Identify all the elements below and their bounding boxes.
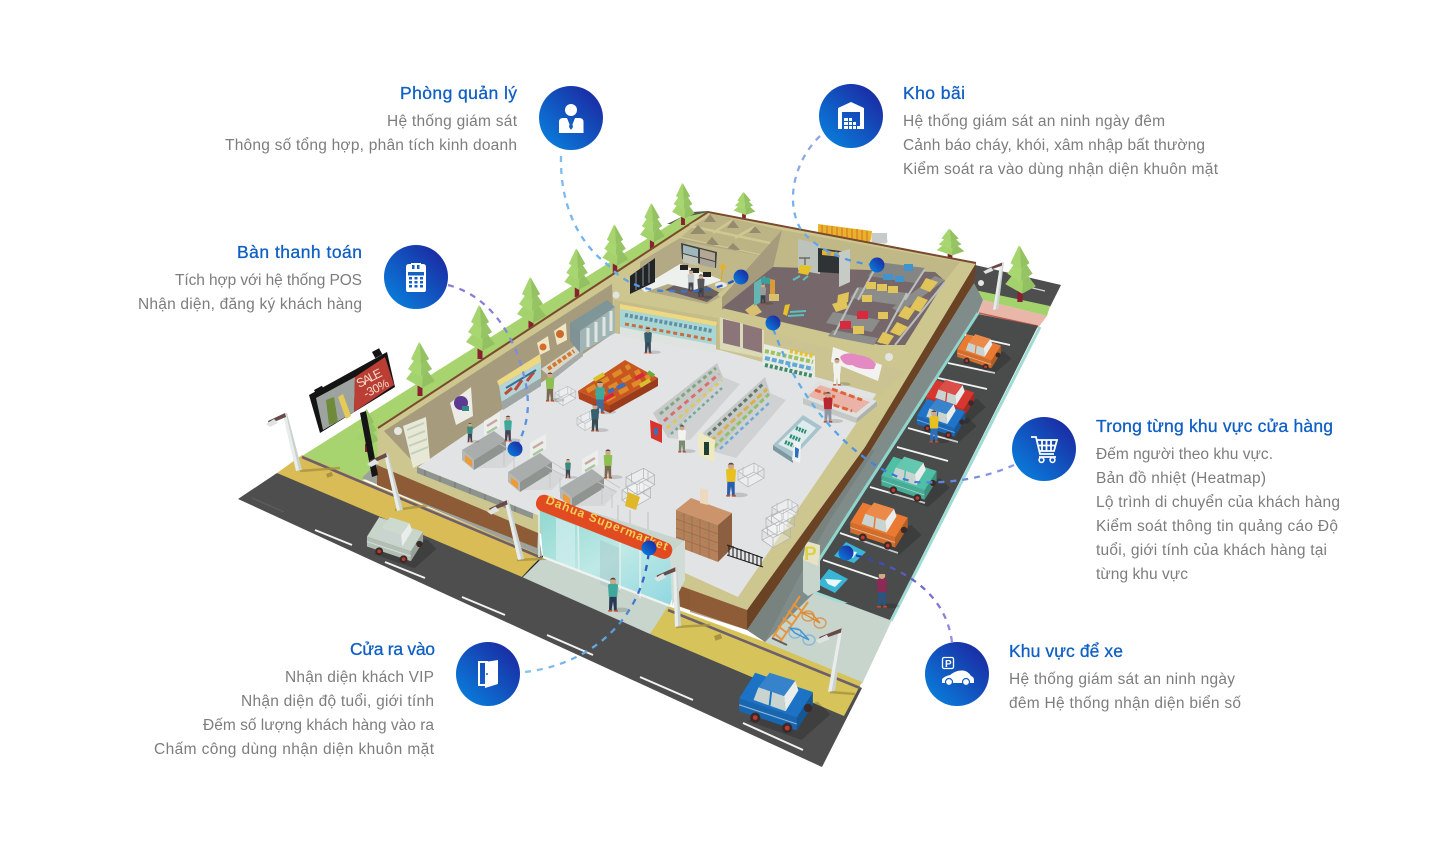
connector: Bàn thanh toán xyxy=(448,285,528,447)
billboard: -30% xyxy=(361,376,392,401)
text: Trong từng khu vực cửa hàng: từng khu vực xyxy=(1096,566,1188,583)
street lamps xyxy=(266,262,1016,692)
poster: price chart xyxy=(403,417,430,468)
parking lot xyxy=(815,313,1040,621)
interior wall face (left) xyxy=(384,284,614,467)
warehouse inner door and worker xyxy=(754,276,779,306)
sign: Dahua Supermarket: Dahua Supermarket xyxy=(544,493,670,553)
wall: deli posters and cases xyxy=(394,292,620,468)
checkout counters xyxy=(462,412,620,508)
warehouse door xyxy=(798,239,850,287)
text: Phòng quản lý: Phòng quản lý xyxy=(400,83,517,103)
shopping carts xyxy=(555,386,798,548)
lockers xyxy=(676,488,732,562)
text: Kho bãi: Hệ thống giám sát an ninh ngày đêm xyxy=(903,113,1165,130)
lawn xyxy=(302,212,708,480)
text: Cửa ra vào xyxy=(154,639,435,758)
icon: payment terminal xyxy=(384,245,448,309)
room: monitoring office xyxy=(630,238,773,304)
text: Cửa ra vào: Cửa ra vào xyxy=(350,639,435,659)
icon: door xyxy=(456,642,520,706)
black fence xyxy=(727,545,763,567)
icon: parking car: P xyxy=(945,659,952,670)
main road xyxy=(238,473,862,767)
shelving and boxes xyxy=(745,262,945,345)
text: Trong từng khu vực cửa hàng: Kiểm soát thông tin quảng cáo Độ xyxy=(1096,518,1338,535)
shop floor xyxy=(418,333,877,597)
bike rack xyxy=(772,596,826,645)
forklifts xyxy=(783,258,812,316)
text: Cửa ra vào: Nhận diện khách VIP xyxy=(285,669,434,686)
entrance glass front xyxy=(539,495,685,606)
connector: Kho bãi xyxy=(793,136,877,265)
text: Trong từng khu vực cửa hàng: tuổi, giới tính của khách hàng tại xyxy=(1096,542,1327,559)
text: Bàn thanh toán xyxy=(138,242,362,313)
connector: Cửa ra vào xyxy=(525,550,649,672)
counter: chilled display xyxy=(497,354,541,410)
text: Phòng quản lý xyxy=(225,83,518,154)
fridges xyxy=(570,300,615,353)
text: Phòng quản lý: Thông số tổng hợp, phân tích kinh doanh xyxy=(225,137,517,154)
connector: Khu vực để xe xyxy=(846,553,952,642)
text: Cửa ra vào: Đếm số lượng khách hàng vào ra xyxy=(203,717,434,734)
aisle shelves xyxy=(650,363,786,462)
billboard: SALE xyxy=(354,366,384,391)
trees xyxy=(356,183,1036,452)
cooler xyxy=(773,415,822,463)
scene: isometric supermarket xyxy=(238,183,1061,767)
text: Khu vực để xe xyxy=(1009,641,1241,712)
people in parking lot xyxy=(877,410,950,608)
text: Trong từng khu vực cửa hàng: Đếm người theo khu vực. xyxy=(1096,446,1273,463)
gray service strip beside building xyxy=(362,283,983,642)
text: Cửa ra vào: Chấm công dùng nhận diện khuôn mặt xyxy=(154,741,435,758)
text: Phòng quản lý: Hệ thống giám sát xyxy=(387,113,518,130)
parking handicap spots xyxy=(817,542,866,593)
poster: purple promo xyxy=(450,387,473,425)
poster: food xyxy=(537,323,567,355)
text: Trong từng khu vực cửa hàng: Lộ trình di chuyển của khách hàng xyxy=(1096,494,1340,511)
back wall faces xyxy=(614,300,905,395)
text: Bàn thanh toán: Bàn thanh toán xyxy=(237,242,362,262)
text: Trong từng khu vực cửa hàng: Trong từng khu vực cửa hàng xyxy=(1096,416,1333,436)
meat counter xyxy=(803,381,877,423)
storage area back rooms xyxy=(680,213,782,258)
text: Trong từng khu vực cửa hàng xyxy=(1096,416,1340,583)
text: Kho bãi: Kho bãi xyxy=(903,83,965,103)
location pins xyxy=(508,258,884,560)
gray apron and entrance walkway xyxy=(522,555,892,684)
icon: shopping cart xyxy=(1012,417,1076,481)
yellow sidewalks xyxy=(277,455,862,716)
text: Khu vực để xe: đêm Hệ thống nhận diện biển số xyxy=(1009,695,1241,712)
icon: warehouse xyxy=(819,84,883,148)
text: Khu vực để xe: Khu vực để xe xyxy=(1009,641,1123,661)
people xyxy=(467,328,851,612)
text: Khu vực để xe: Hệ thống giám sát an ninh ngày xyxy=(1009,671,1235,688)
basket stack xyxy=(618,492,648,535)
staff door xyxy=(720,317,764,358)
connector: Trong từng khu vực xyxy=(772,325,1014,482)
pig poster xyxy=(831,347,882,381)
truck behind warehouse xyxy=(818,224,888,245)
connector: Phòng quản lý xyxy=(561,156,741,291)
text: Cửa ra vào: Nhận diện độ tuổi, giới tính xyxy=(241,693,434,710)
text: Kho bãi: Cảnh báo cháy, khói, xâm nhập bất thường xyxy=(903,137,1205,154)
room: warehouse xyxy=(722,230,960,345)
building shell xyxy=(377,211,976,630)
back road behind building xyxy=(667,211,1061,328)
P parking sign xyxy=(803,541,820,596)
text: Trong từng khu vực cửa hàng: Bản đồ nhiệt (Heatmap) xyxy=(1096,470,1266,487)
produce stand xyxy=(578,360,658,413)
text: Kho bãi: Kiểm soát ra vào dùng nhận diện khuôn mặt xyxy=(903,161,1219,178)
text: Kho bãi xyxy=(903,83,1219,178)
right shelf xyxy=(762,344,815,379)
counter: bakery xyxy=(541,345,583,382)
back wall cases xyxy=(620,304,717,353)
icon: manager xyxy=(539,86,603,150)
icon: parking car xyxy=(925,642,989,706)
cars xyxy=(367,334,1011,740)
billboard xyxy=(309,348,395,477)
P parking sign: P xyxy=(804,544,817,565)
text: Bàn thanh toán: Nhận diện, đăng ký khách hàng xyxy=(138,296,362,313)
text: Bàn thanh toán: Tích hợp với hệ thống POS xyxy=(175,272,362,289)
